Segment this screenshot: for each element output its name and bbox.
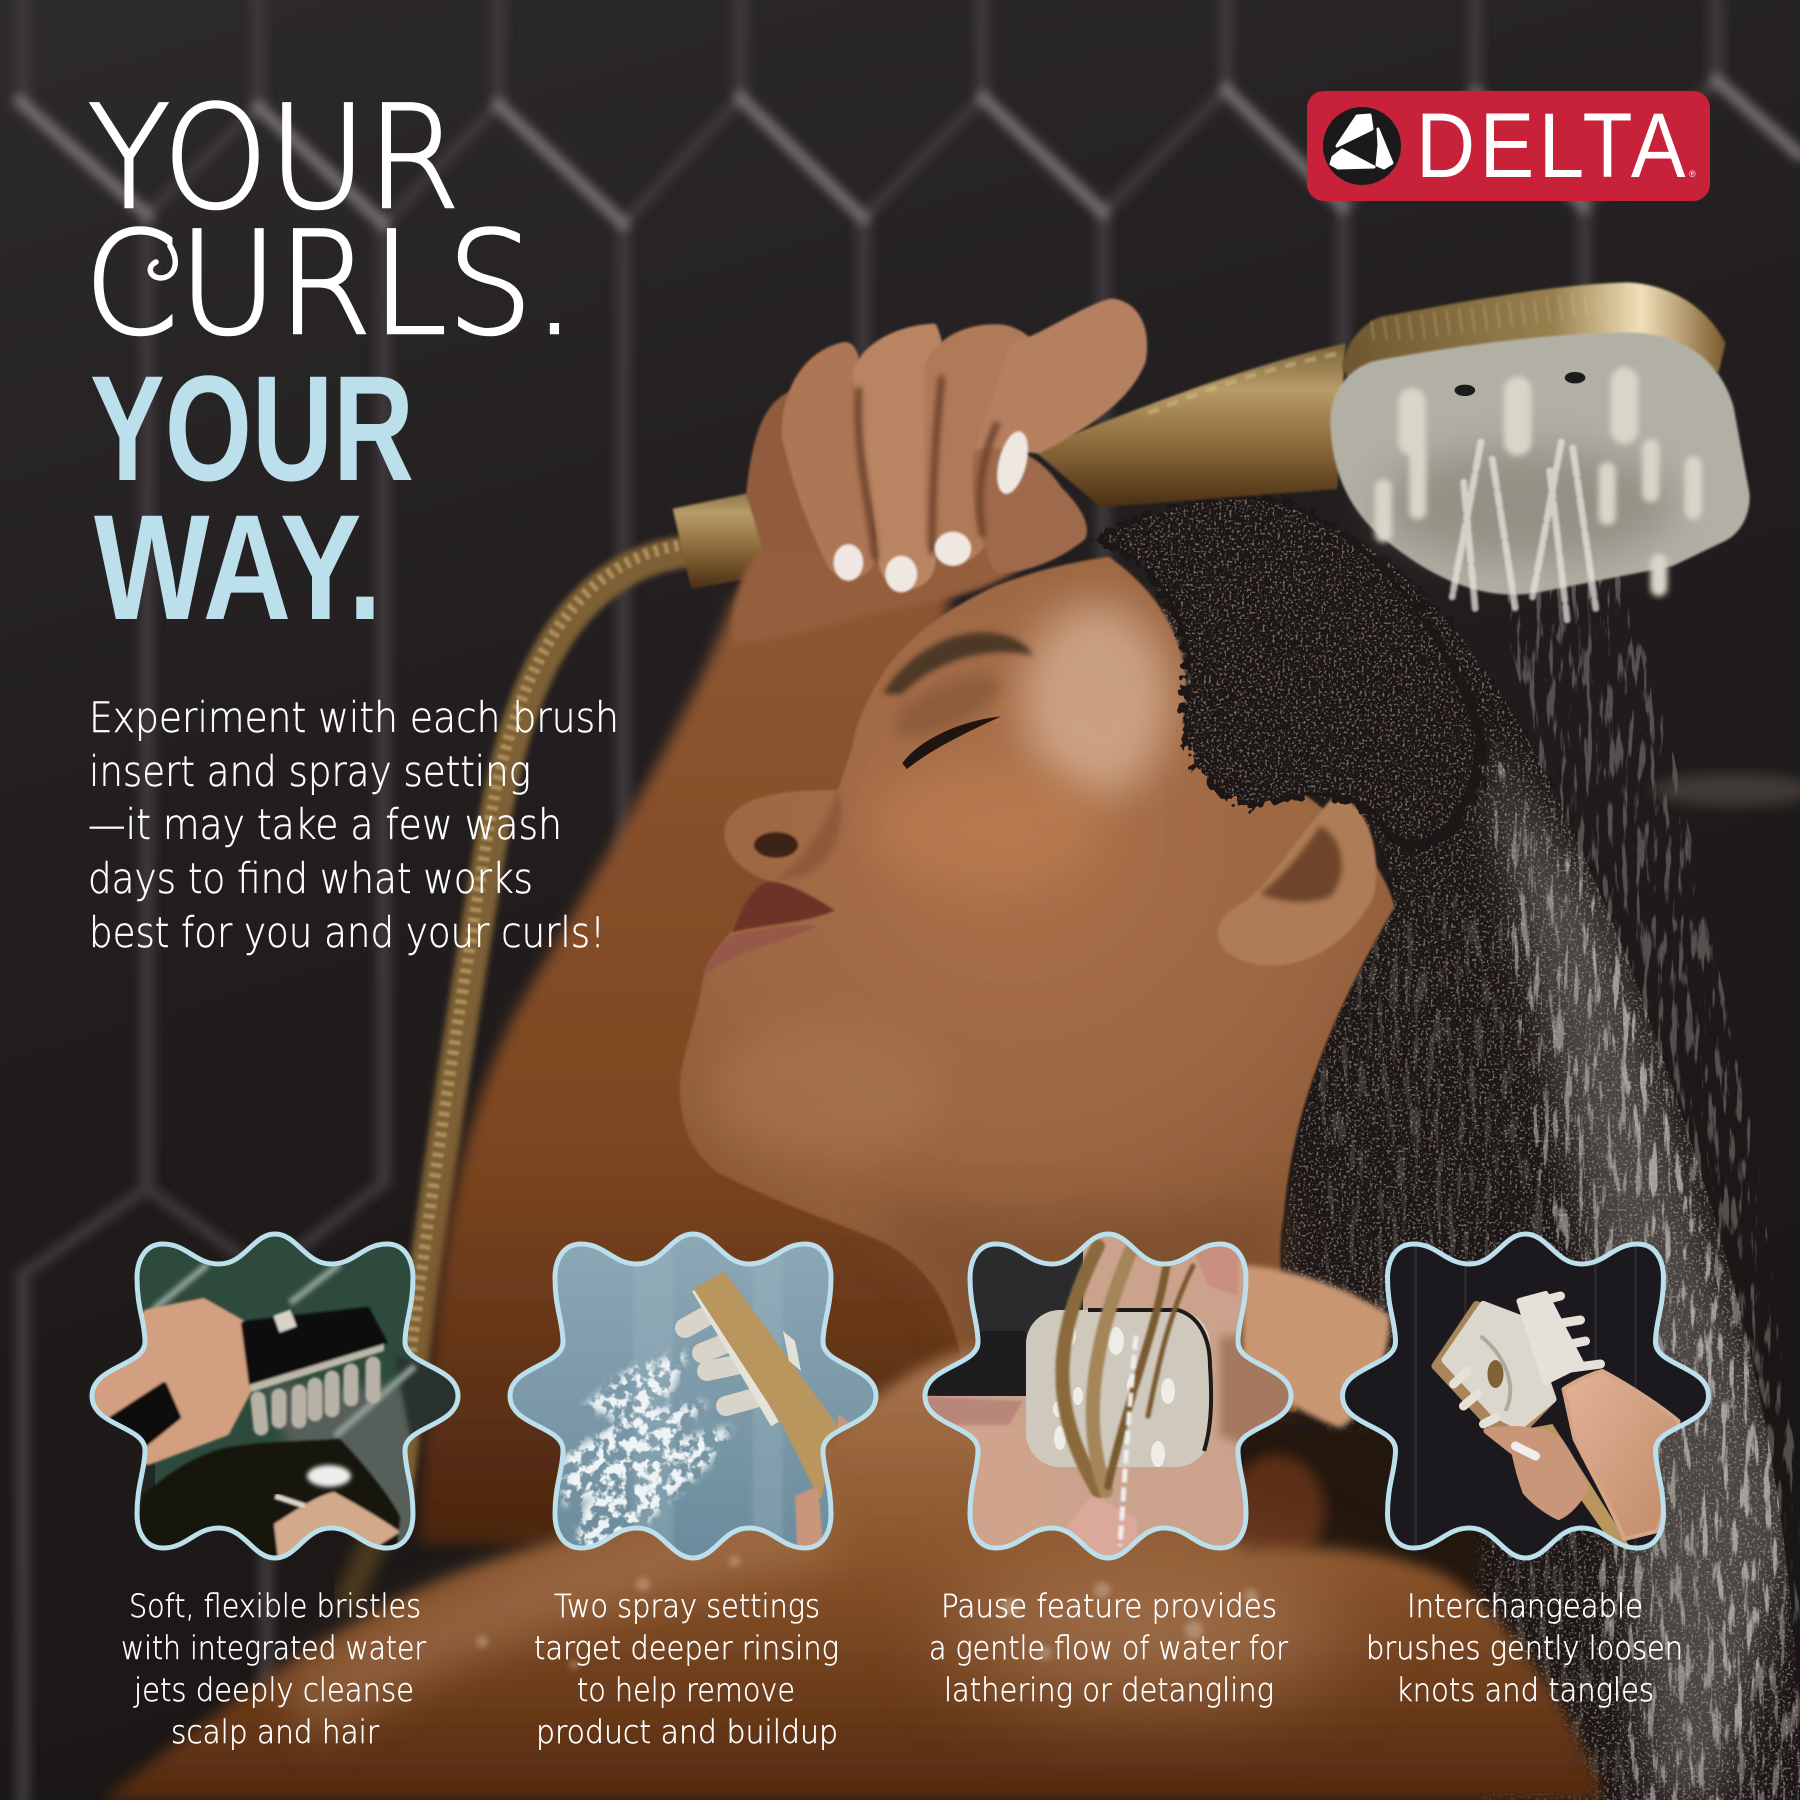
palm heel [973, 448, 1087, 573]
ear [1218, 796, 1376, 965]
bright streaks in the wet hair [1481, 735, 1800, 1800]
caption: soft bristles: jets deeply cleanse [133, 1671, 414, 1709]
caption: soft bristles [121, 1587, 427, 1751]
title line: WAY. (bold): WAY. [94, 483, 382, 651]
neck and face [680, 557, 1395, 1424]
medallion: soft bristles photo [85, 1226, 465, 1566]
wand connector [673, 483, 820, 589]
finger 3 [924, 324, 1041, 562]
closed eye lashes [902, 716, 1001, 769]
body paragraph: insert and spray setting [89, 747, 531, 796]
neck shadow [884, 1194, 1297, 1424]
jet holes [1455, 372, 1585, 396]
logo red badge [1307, 91, 1710, 201]
eyebrow [883, 632, 1033, 695]
cheek glow [872, 763, 1102, 890]
caption: spray settings: target deeper rinsing [534, 1629, 839, 1667]
body paragraph: best for you and your curls! [89, 908, 605, 957]
brush plate [1330, 333, 1750, 595]
caption: spray settings: to help remove [577, 1671, 795, 1709]
lower lip [703, 925, 817, 975]
caption: spray settings: Two spray settings [554, 1587, 820, 1625]
title line: YOUR (bold): YOUR [90, 344, 414, 512]
raised arm behind the face [419, 574, 1010, 1544]
finger shadows [858, 379, 996, 557]
logo wordmark: DELTA [1416, 95, 1690, 197]
caption: pause feature: lathering or detangling [944, 1671, 1274, 1709]
nose side shadow [770, 790, 842, 882]
caption: pause feature: Pause feature provides [941, 1587, 1277, 1625]
caption: spray settings: product and buildup [536, 1713, 838, 1751]
caption: soft bristles: with integrated water [121, 1629, 427, 1667]
hand gripping wand [732, 298, 1147, 643]
wrist [732, 540, 1056, 643]
long wet hair [1148, 482, 1800, 1800]
body paragraph: Experiment with each brush [89, 693, 619, 742]
icon: curl flourish on the C [150, 246, 175, 278]
caption: interchangeable brushes: Interchangeable [1407, 1587, 1643, 1625]
Delta logo [1307, 91, 1710, 201]
caption: soft bristles: Soft, flexible bristles [129, 1587, 421, 1625]
water droplets on skin [476, 1556, 1258, 1669]
medallion: two spray settings photo [503, 1226, 883, 1566]
finger 1 [782, 342, 875, 578]
title line: YOUR: YOUR [88, 76, 460, 241]
near arm and chest [103, 1349, 1604, 1800]
caption: interchangeable brushes: brushes gently loosen [1366, 1629, 1683, 1667]
finger 2 [853, 324, 946, 589]
caption: spray settings [534, 1587, 839, 1751]
body paragraph [88, 693, 619, 957]
shower head gold back [1342, 282, 1725, 390]
fingernails [833, 428, 1034, 592]
water leaving the head [1452, 442, 1596, 620]
gold flexible hose [344, 544, 689, 1607]
gold back droplets [1372, 301, 1607, 333]
eye socket shade [886, 664, 1008, 748]
upper chest piece [1228, 1455, 1325, 1565]
shoulder highlight [953, 1561, 1343, 1699]
chin light [712, 1022, 941, 1159]
arm highlight [298, 1527, 827, 1711]
thumb [976, 298, 1147, 453]
body paragraph: days to find what works [88, 854, 533, 903]
caption: soft bristles: scalp and hair [171, 1713, 380, 1751]
ear inner shadow [1261, 827, 1342, 902]
logo black circle [1323, 107, 1401, 185]
body paragraph: —it may take a few wash [88, 800, 562, 849]
caption: pause feature [929, 1587, 1289, 1709]
caption: interchangeable brushes: knots and tangles [1396, 1671, 1654, 1709]
medallion: interchangeable brushes photo [1336, 1226, 1716, 1566]
upper lip [732, 882, 835, 932]
registered mark: ® [1689, 169, 1696, 179]
falling water spray [1492, 574, 1800, 1800]
wand handle [1033, 343, 1345, 507]
logo white triangle mark [1331, 115, 1392, 168]
caption: pause feature: a gentle flow of water for [929, 1629, 1289, 1667]
back hand [1243, 1265, 1390, 1428]
nostril [754, 832, 798, 858]
wand sparkle [1148, 354, 1337, 413]
distant highlight in the spray [1653, 774, 1800, 806]
brush plate bristles [1383, 381, 1693, 588]
shower hand wand [673, 282, 1750, 620]
shadowed gap under hand [1240, 1424, 1481, 1607]
title [84, 76, 576, 651]
medallion: pause feature photo [918, 1226, 1298, 1566]
caption: interchangeable brushes [1366, 1587, 1683, 1709]
title line: CURLS.: CURLS. [84, 202, 576, 367]
small finger [746, 390, 827, 551]
spray blotches [563, 1351, 733, 1561]
out-of-focus near arm and shoulder [103, 1265, 1604, 1800]
water sheen over hair [1481, 735, 1800, 1800]
brush plate shading [1378, 448, 1676, 563]
curly hair crown [1091, 494, 1487, 852]
forehead sheen [1022, 603, 1171, 798]
